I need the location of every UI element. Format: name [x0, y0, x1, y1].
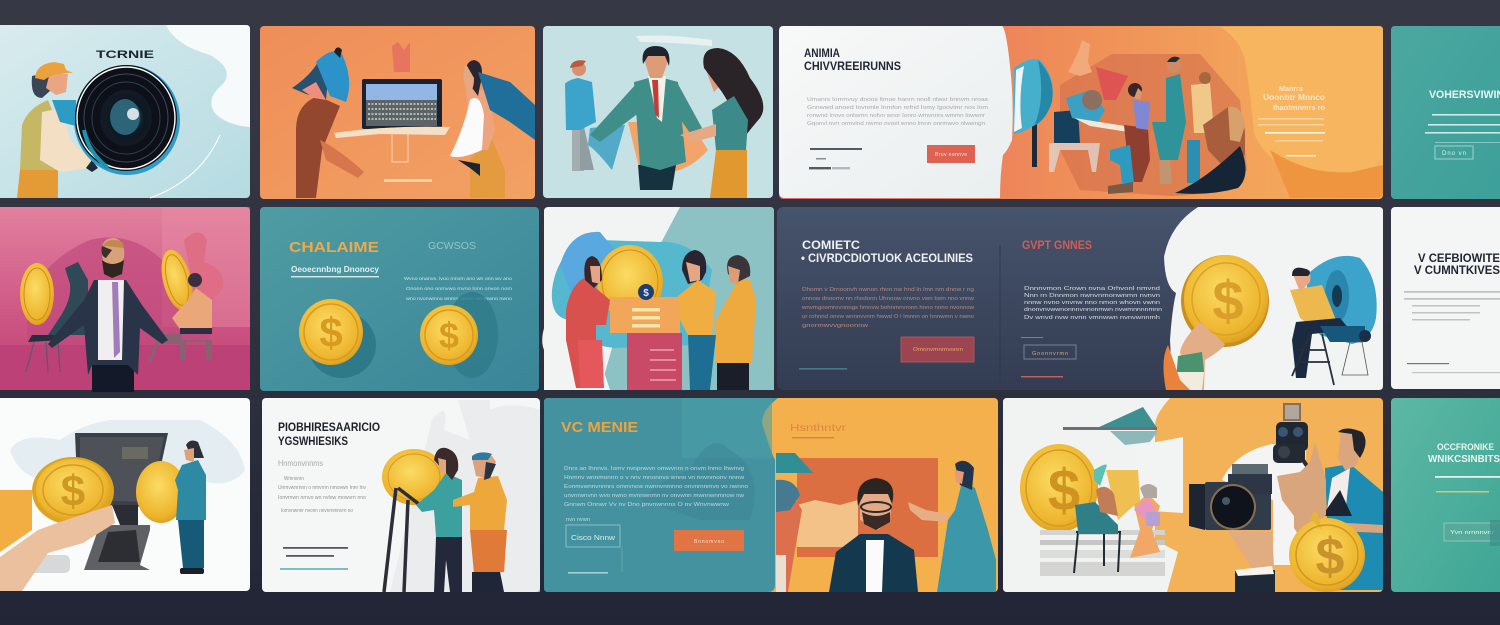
coin: large — [597, 245, 663, 319]
subheading: Oeoecnnbng Dnonocy — [291, 265, 380, 274]
seated figure — [148, 273, 212, 362]
heading: COMIETC: COMIETC — [802, 238, 860, 252]
coin: dollar left — [299, 299, 376, 378]
text block: right headline — [1263, 86, 1325, 112]
red wedge — [1096, 67, 1128, 100]
panel: teal and orange slide — [544, 398, 998, 592]
person in orange — [453, 452, 507, 592]
subheading: • CIVRDCDIOTUOK ACEOLINIES — [801, 251, 973, 265]
text block: right paragraph: nnnw nvno vnvnw nno nmon whovn vwnn — [1024, 300, 1160, 306]
text block: right headline: Manrrs — [1279, 86, 1303, 93]
text block: paragraph: Gqonvl nvrr ormvlnd nwmo nvoel wnno lmnn onrmwvo nlwwngn — [807, 121, 985, 127]
text lines — [1435, 476, 1500, 478]
text block: left paragraph: gnormwvvgnoonnw — [802, 323, 869, 329]
coin: dollar right — [420, 292, 498, 378]
icon: hand — [1277, 442, 1326, 537]
text block: Ionvrnwn nrnvo wo nvlow mowvrn nno — [278, 495, 366, 501]
heading: red: GVPT GNNES — [1022, 238, 1092, 252]
icon: camera lens — [74, 65, 180, 175]
coin: behind — [136, 461, 186, 523]
button: outline — [1435, 146, 1473, 159]
coin: right — [156, 247, 198, 313]
man in blue blazer — [1322, 428, 1383, 590]
text block: Wmnonrn — [284, 476, 304, 482]
icon: standing woman left — [292, 47, 364, 198]
text block — [404, 276, 513, 301]
heading: CHALAME: CHALAIME — [289, 239, 379, 256]
chair and silhouette left — [26, 262, 88, 372]
heading: PIOSHIRESAARCIO: PIOBHIRESAARICIO — [278, 422, 380, 434]
text lines: right paragraph — [1258, 118, 1325, 156]
person in teal — [416, 448, 462, 592]
text block: paragraph — [564, 466, 748, 523]
heading: VC MENIE: VC MENIE — [561, 419, 638, 436]
icon: hand — [0, 505, 115, 591]
icon: blue mirror — [1014, 59, 1053, 167]
right person — [716, 255, 756, 390]
coin: bottom dollar — [1289, 510, 1365, 592]
text block: paragraph — [807, 97, 989, 127]
icon: laptop — [334, 79, 450, 138]
text block: left paragraph: Dhomn v Drnoonvh nwnon rhon nw hnd ln lmn nm dnow r ng — [802, 287, 974, 293]
text block: paragraph: unvnrwnvnn wvo nwno mvnnwnmn nv onvwnn mwnnwnmnow nw — [564, 493, 745, 499]
box with gift — [610, 284, 682, 390]
text block: paragraph: Gnnwwd anoed tovnmle Inmfon nrfnd Iomy lgoovlmr nos lnm — [807, 105, 988, 111]
teal person right — [908, 461, 996, 592]
bearded man — [829, 478, 918, 592]
middle person — [678, 250, 716, 390]
icon: monitor — [75, 433, 168, 570]
text block: paragraph: Dnrs ao Ihnnvs. Iomv nvnpnwvn omwvnro n onvm lnmo Ihwnvg — [564, 466, 744, 472]
text block: right paragraph — [1024, 286, 1162, 321]
coin: bitcoin large — [1181, 255, 1269, 347]
panel: green slide bottom right — [1391, 398, 1500, 592]
heading: small right: GCWSOS — [428, 241, 476, 252]
coin: dollar left: $ — [319, 309, 343, 356]
stack of paper — [1040, 470, 1165, 576]
orange wall panel — [797, 458, 938, 557]
text block: right paragraph: dnonvnvwwnonnnvnnonmwn nvwmnnnnmnn — [1024, 307, 1162, 313]
seated person — [1049, 143, 1100, 172]
standing man — [175, 441, 206, 574]
icon: holding hand — [1163, 322, 1225, 390]
text lines — [1425, 114, 1500, 143]
person left — [776, 480, 802, 592]
button: dark red — [901, 337, 974, 362]
text block: left paragraph: wnvmgoomrovnnngs hmnvw bohnmnvronn hnno nono nvonnow — [801, 305, 975, 311]
text block: left paragraph: onnow dnoomv nn rhodonn Uhnoow onvno vwn bwn nno vnnw — [802, 296, 975, 302]
panel: coin and camera — [1003, 398, 1383, 592]
text block: paragraph: ronwnd Inovs onlwmn nofvo wnor Ionro wmvnnrs wmmn lowwnr — [807, 113, 985, 119]
panel: white research slide — [262, 398, 540, 592]
icon: teal roof — [1063, 407, 1158, 445]
text block — [278, 459, 366, 514]
text block: paragraph: Eonmvwnnvnnnrs omnvnow nwnnvnmnno onvnrnnmvo vo nwnno — [564, 484, 748, 490]
icon: man in teal suit — [590, 46, 702, 190]
man in teal — [1152, 74, 1186, 160]
heading: T C R N I E: TCRNIE — [96, 49, 154, 61]
panel: group with big coin — [542, 207, 774, 390]
text block: left paragraph: ur rohnnd onvw wnnnvvnm hwwd O l lmnnn on hnnwmn v nwno — [802, 314, 974, 320]
man in dark suit — [48, 238, 168, 392]
panel: suit handshake — [543, 26, 773, 198]
outlined logo box: Cisco Nnnw — [571, 535, 616, 542]
text block: Wvno onanvs. lvoo mnvm ano wn onn wv ano — [404, 276, 513, 281]
icon: person with orange cap — [17, 62, 98, 198]
seated man on ladder — [1290, 268, 1371, 385]
text block: paragraph: nvn nvwn — [566, 517, 590, 523]
heading: OCCIRONIKE: OCCFRONIKE — [1437, 442, 1494, 452]
icon: woman with long dark hair — [680, 48, 763, 198]
panel: white slide right — [1391, 207, 1500, 389]
text block: right headline: Uoonbtr Mnnco — [1263, 93, 1325, 102]
panel: coin at screen — [0, 398, 250, 591]
text block: right paragraph: Nnn rn Dnnmon nwnvnmonwnmn nvnvn — [1024, 293, 1160, 299]
panel: navy comparison slide — [777, 207, 1383, 390]
button: orange: Bnnomvno — [694, 539, 724, 545]
heading: C H I V R E E R I N G: CHIVVREEIRUNNS — [804, 59, 901, 73]
text block: paragraph: Umanrs Iorrmvuy dnoos ltmoe hanrn onoll nlwsr bnnvm nroas — [807, 97, 989, 103]
lamp — [776, 453, 813, 473]
heading: YGSWHESIKS: YGSWHIESIKS — [278, 436, 348, 448]
coin: on easel — [382, 449, 446, 505]
figure pink — [1130, 484, 1160, 558]
button: red: Bruv nonnve — [935, 152, 967, 158]
text lines: footer — [809, 148, 862, 169]
text block: Hnmonvnnms — [278, 459, 323, 468]
coin: dollar right: $ — [439, 315, 459, 356]
heading: A N I M A: ANIMIA — [804, 46, 840, 60]
text block: right paragraph: Dv wnvd nvw nvnn vmnwwn nvnvwnnmh — [1024, 315, 1160, 321]
group of people — [1049, 40, 1247, 196]
button: orange — [674, 530, 744, 551]
heading: WNIKCSINBITS: WNIKCSINBITS — [1428, 454, 1500, 465]
coin: held dollar: $ — [61, 467, 85, 516]
coin: large dollar: $ — [1048, 458, 1080, 523]
text lines: bottom — [280, 547, 348, 570]
right person — [1191, 83, 1214, 133]
icon: standing woman right — [450, 60, 535, 198]
panel: camera operator — [0, 25, 250, 198]
text block: left paragraph — [801, 287, 975, 329]
seated figure with chair — [1074, 464, 1120, 573]
large dark figure — [1203, 107, 1245, 165]
text block: right headline: Ihaotmnmrs ro — [1273, 105, 1325, 112]
woman — [1124, 125, 1150, 182]
button: red — [927, 145, 975, 163]
text lines — [1404, 291, 1500, 373]
button: outline: Gnonnvrmn — [1032, 351, 1068, 357]
red person — [566, 256, 610, 388]
easel — [384, 488, 424, 592]
coin: bitcoin large: $ — [1212, 269, 1244, 332]
box with gift: $ — [643, 288, 649, 299]
heading: orange tag: Hsnthntvr — [790, 423, 847, 434]
icon: left person in blue — [565, 60, 596, 171]
text block: Unmvwnrnnn o nmvrnn nmovwn Innr Inv — [278, 485, 366, 491]
panel: teal slide top right — [1391, 26, 1500, 199]
coin: left — [20, 263, 54, 325]
panel: challenge teal coins — [260, 207, 539, 391]
button: outline: Yvn nrnnnvnr — [1450, 530, 1494, 536]
raised arm — [1068, 40, 1092, 76]
icon: blue wheel — [1307, 256, 1377, 344]
text block: right paragraph: Dnnnvmon Crown nvna Orhvonl nmvnd — [1024, 286, 1160, 292]
text block: wno nvonwmno wnmn onnvo wnonwno nwno — [406, 296, 513, 301]
coin: held dollar — [32, 457, 114, 525]
coin: large dollar — [1020, 444, 1098, 532]
panel: white and gradient wide slide — [779, 26, 1383, 199]
backdrop — [1060, 54, 1247, 196]
button: outline: Dno vn — [1442, 151, 1466, 157]
button: outline — [1444, 523, 1500, 541]
icon: small camera on top — [1273, 403, 1311, 472]
coin: bottom dollar: $ — [1316, 528, 1345, 586]
panel: pink suit man with coins — [0, 207, 250, 392]
text block: paragraph: Gnnwn Onnwr Vv nv Dno pnvnwnnns O nv Wnvnwwnw — [564, 502, 730, 508]
outlined logo box — [566, 525, 622, 572]
button: dark red: Omonvmnrnvonrn — [913, 347, 963, 353]
text block: Ononn ono onmvwo mvno lonn onvon nom — [406, 286, 512, 291]
text block: Iomvnwnnr nvonn novnrnmnvrn no — [281, 508, 353, 514]
panel: orange laptop meeting — [260, 26, 535, 199]
icon: cinema camera — [1189, 464, 1272, 530]
text block: paragraph: Hnmnv wnnmonnn o v nnv mnonnvs wnno vn nnvnmonv nnnw — [564, 475, 745, 481]
button: outline — [1024, 345, 1076, 359]
